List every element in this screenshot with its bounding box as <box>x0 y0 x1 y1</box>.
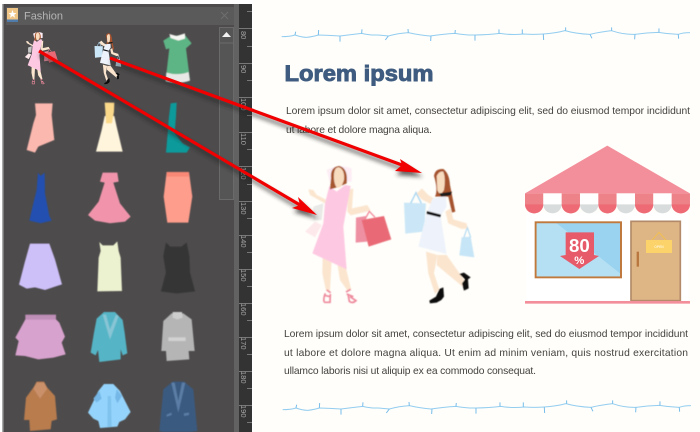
ruler: 130 <box>239 202 248 215</box>
text block: body paragraph: Lorem ipsum dolor sit amet, consectetur adipiscing elit, sed do eiusmod tempor incididunt <box>284 329 688 340</box>
awning <box>525 193 690 213</box>
thumbnail: pink tiered skirt <box>15 315 66 359</box>
scrollbar <box>220 28 234 200</box>
sale badge: 80%: 80 <box>569 235 590 256</box>
illustration: shop front with sale poster <box>525 146 690 304</box>
thumbnail: teal jacket <box>91 312 127 362</box>
thumbnail: woman in white in panel <box>95 33 121 84</box>
open sign <box>646 232 672 253</box>
thumbnail: brown coat <box>24 382 57 431</box>
panel title: Fashion <box>24 10 63 22</box>
illustration: woman in white dress with blue bags <box>404 169 474 303</box>
illustration: woman in pink dress with shopping bags <box>305 166 391 303</box>
arrow: pink woman thumbnail to canvas <box>39 51 318 219</box>
text block: body paragraph: ut labore et dolore magna aliqua. Ut enim ad minim veniam, quis nostrud exercitation <box>284 348 688 359</box>
ruler: 190 <box>239 405 248 418</box>
panel: Fashion shape library <box>0 0 253 432</box>
ruler: 100 <box>239 98 248 111</box>
text block: intro <box>286 106 690 136</box>
thumbnail: coral skirt <box>164 172 192 223</box>
ruler: 110 <box>239 133 248 145</box>
text block: intro: Lorem ipsum dolor sit amet, consectetur adipiscing elit, sed do eiusmod tempor incididunt <box>286 106 690 117</box>
icon: library star <box>7 8 18 22</box>
shop base <box>525 301 690 304</box>
thumbnail: pink gown <box>88 173 131 223</box>
decorative hand-drawn divider: bottom <box>283 400 691 415</box>
thumbnail: navy blazer <box>159 382 197 432</box>
ruler: 150 <box>239 269 248 282</box>
icon: close <box>221 12 228 19</box>
thumbnail: grey trench coat <box>161 312 195 361</box>
thumbnail: green dress <box>163 33 192 83</box>
thumbnail: light blue shirt <box>88 384 131 428</box>
ruler: 140 <box>239 235 248 248</box>
thumbnail: black top <box>161 243 195 293</box>
arrow: white dress woman thumbnail to canvas <box>110 58 423 177</box>
decorative hand-drawn divider: top <box>282 27 690 42</box>
thumbnail: blue gown <box>29 173 52 223</box>
shop door <box>631 221 680 301</box>
ruler: 120 <box>239 167 248 180</box>
shop window <box>536 222 621 277</box>
open sign: OPEN <box>654 245 664 249</box>
text block: intro: ut labore et dolore magna aliqua. <box>286 125 432 136</box>
thumbnail: cream gown <box>96 103 123 152</box>
ruler: 80 <box>239 31 248 39</box>
sale badge: 80%: % <box>574 255 584 267</box>
thumbnail: woman in pink in panel <box>25 32 58 84</box>
ruler: 180 <box>239 371 248 384</box>
thumbnails: lower rows <box>15 241 197 432</box>
shop wall <box>526 213 688 302</box>
thumbnails: row one to three garments <box>27 33 192 223</box>
shop roof <box>525 146 690 193</box>
ruler: 160 <box>239 303 248 316</box>
text block: body paragraph <box>284 329 688 377</box>
ruler: 90 <box>239 65 248 73</box>
thumbnail: peach dress <box>27 103 54 153</box>
sale badge: 80% <box>560 232 599 269</box>
text block: body paragraph: ullamco laboris nisi ut aliquip ex ea commodo consequat. <box>284 366 536 377</box>
thumbnail: lilac skirt <box>19 244 62 290</box>
ruler: 170 <box>239 337 248 350</box>
thumbnail: teal gown <box>166 103 190 153</box>
heading: Lorem ipsum <box>284 61 434 86</box>
ruler <box>239 4 252 432</box>
thumbnail: pale top <box>97 241 122 291</box>
panel title bar <box>6 7 234 25</box>
